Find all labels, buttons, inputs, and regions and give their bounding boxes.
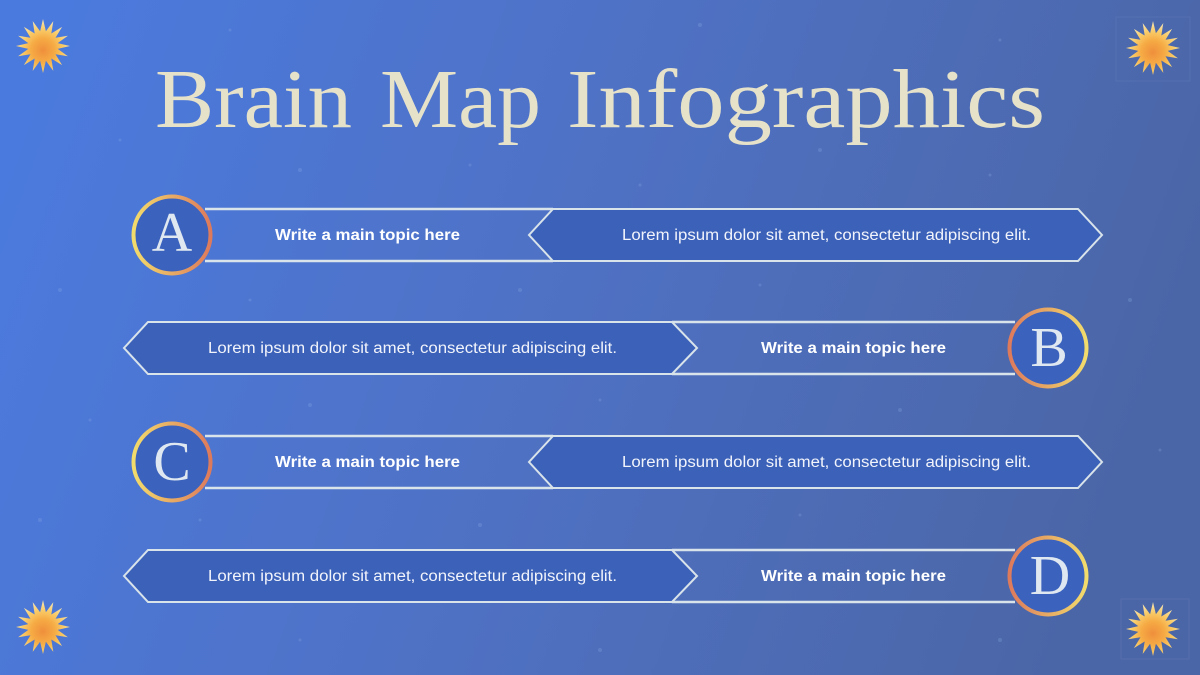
topic D: Write a main topic here — [761, 568, 946, 585]
panel: row B — [124, 310, 1086, 386]
description C: Lorem ipsum dolor sit amet, consectetur adipiscing elit. — [622, 454, 1031, 471]
topic C: Write a main topic here — [275, 454, 460, 471]
description arrow A — [529, 209, 1102, 261]
badge C: C — [153, 431, 191, 493]
panel: row A — [134, 196, 1102, 274]
badge D: D — [1030, 545, 1070, 607]
description A: Lorem ipsum dolor sit amet, consectetur adipiscing elit. — [622, 227, 1031, 244]
description D: Lorem ipsum dolor sit amet, consectetur adipiscing elit. — [208, 568, 617, 585]
icon: star bottom right — [1121, 599, 1189, 659]
description arrow C — [529, 436, 1102, 488]
badge A: A — [152, 202, 193, 264]
badge D — [1010, 538, 1086, 614]
badge B — [1010, 310, 1086, 386]
title: Map — [380, 53, 541, 146]
badge A — [134, 196, 210, 274]
description arrow B — [124, 322, 697, 374]
title: Brain — [155, 53, 352, 146]
icon: star top left — [16, 19, 70, 73]
panel: row C — [134, 424, 1102, 500]
icon: star bottom left — [16, 600, 70, 654]
description arrow D — [124, 550, 697, 602]
title: Infographics — [567, 53, 1045, 146]
topic A: Write a main topic here — [275, 227, 460, 244]
badge B: B — [1030, 317, 1068, 379]
topic B: Write a main topic here — [761, 340, 946, 357]
panel: row D — [124, 538, 1086, 614]
icon: star top right — [1116, 17, 1190, 81]
description B: Lorem ipsum dolor sit amet, consectetur adipiscing elit. — [208, 340, 617, 357]
badge C — [134, 424, 210, 500]
